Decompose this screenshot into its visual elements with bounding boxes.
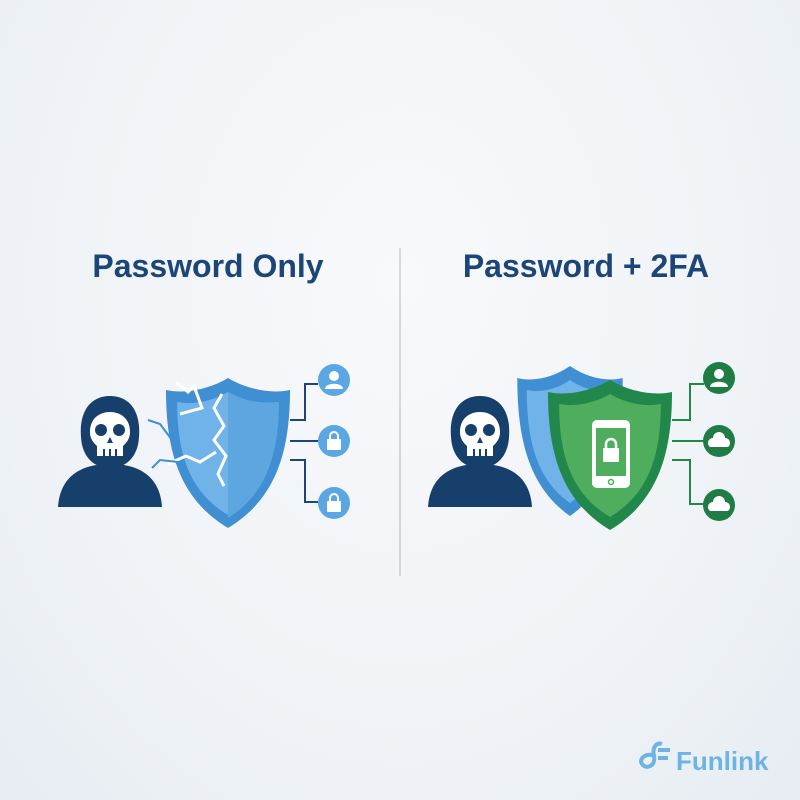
icon: lock circle 2 (318, 487, 350, 519)
icon: user circle (318, 364, 350, 396)
divider (399, 248, 401, 576)
logo: Funlink (641, 744, 769, 776)
logo: Funlink: Funlink (676, 746, 769, 776)
icon: user green (703, 362, 735, 394)
icon: broken shield (166, 378, 290, 528)
connectors left (148, 420, 178, 468)
icon: blue back shield (517, 366, 623, 516)
icon: lock circle (318, 425, 350, 457)
icon: cloud green (703, 425, 735, 457)
panel: password + 2FA (428, 362, 735, 530)
icon: hacker right (428, 396, 532, 507)
icon: green shield with phone (548, 380, 672, 530)
connectors right (672, 384, 704, 504)
panel: password only (58, 364, 350, 528)
icon: hacker left (58, 396, 162, 507)
icon: cloud green 2 (703, 489, 735, 521)
title: Password + 2FA: Password + 2FA (463, 248, 709, 284)
title: Password Only: Password Only (92, 248, 324, 284)
